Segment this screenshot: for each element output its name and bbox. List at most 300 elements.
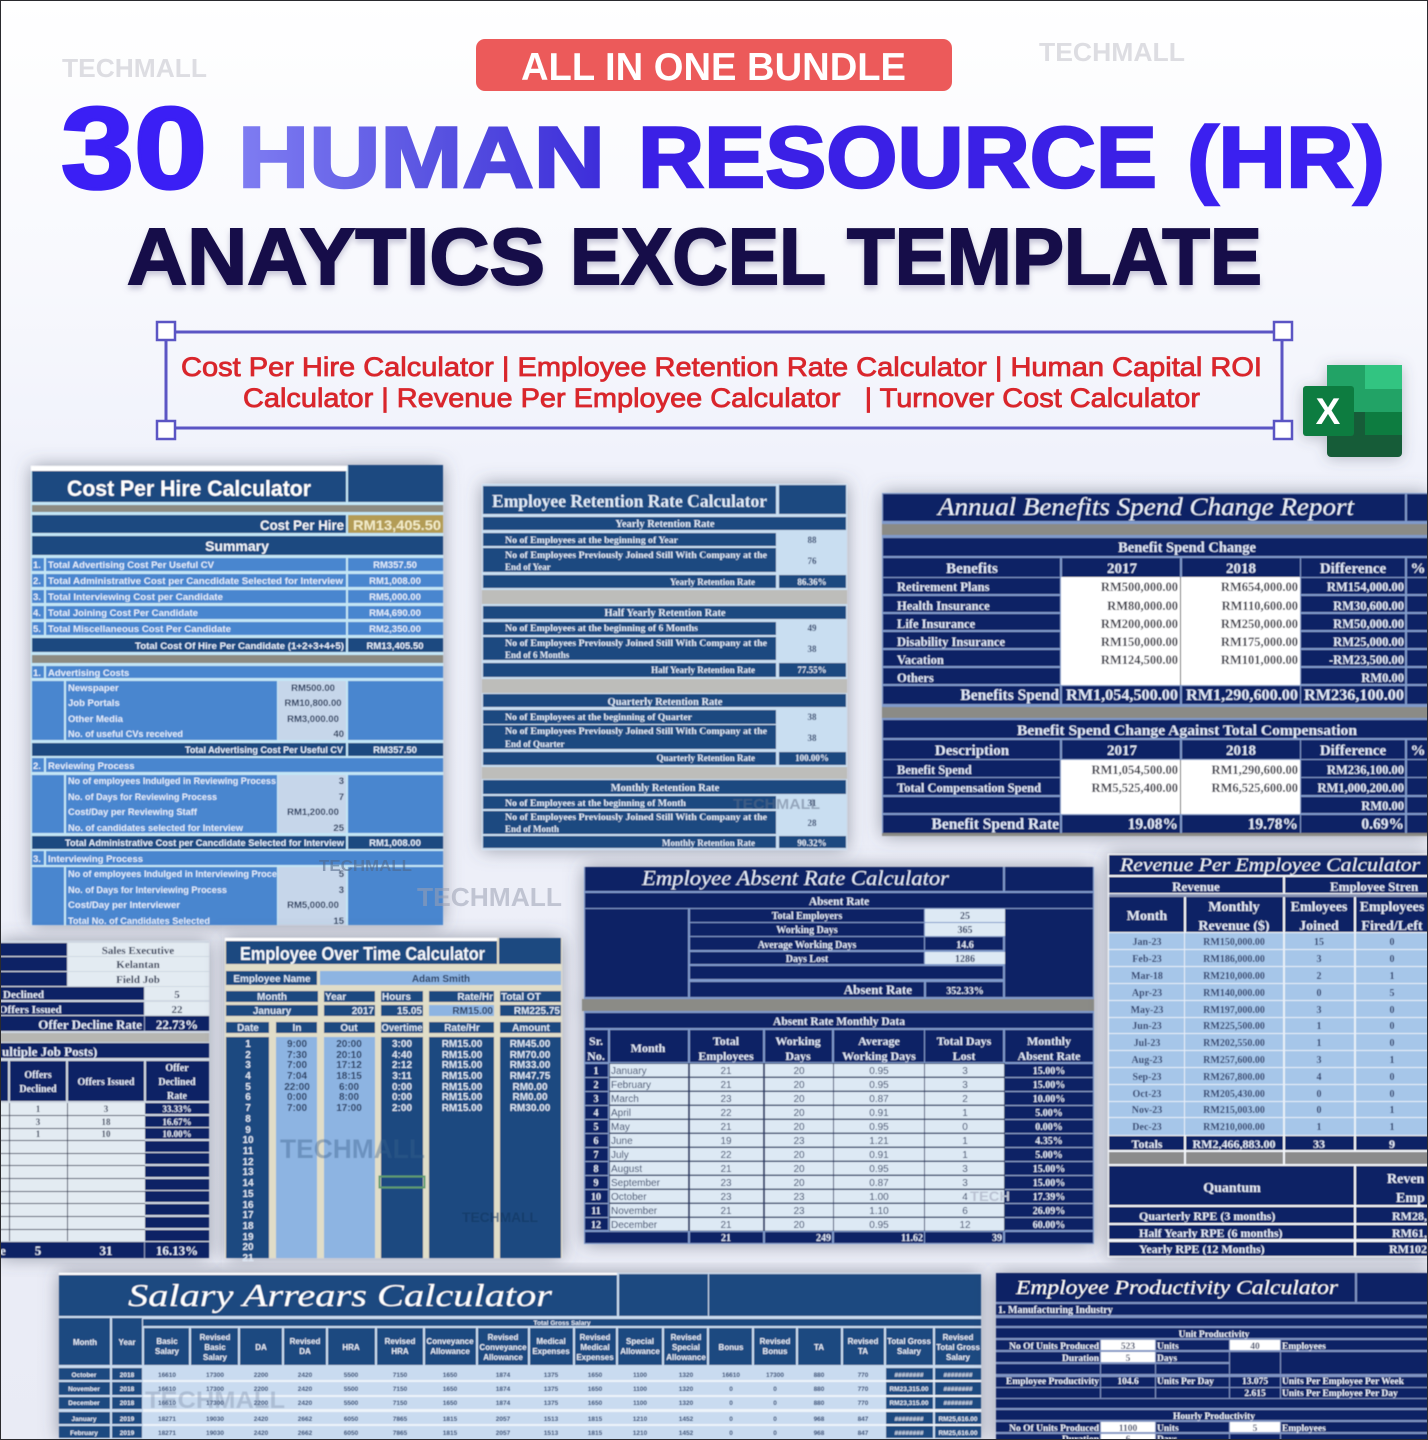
table: absent rate monthly data: 3 [962,1178,968,1189]
table: absent rate monthly data: 19 [720,1136,732,1147]
salary rows: 1815 [588,1430,603,1437]
table: absent rate monthly data: 23 [793,1206,805,1217]
table: benefit spend against total compensation: 2018 [1226,743,1256,759]
overtime log columns: 18 [242,1221,254,1232]
table headers: Revised [848,1337,878,1346]
block: monthly retention rate: No of Employees Previously Joined Still With Company at the [505,812,767,822]
table body: monthly revenue rows: 3 [1316,1055,1322,1066]
overtime log columns: RM47.75 [510,1071,551,1082]
block: quarterly retention rate: 38 [808,733,817,743]
table: absent rate monthly data: 0.87 [869,1094,889,1105]
salary rows: 2057 [496,1416,511,1423]
section: interviewing process [32,851,443,927]
table: absent rate monthly data: 1.21 [869,1136,889,1147]
salary rows: 2420 [298,1386,313,1393]
table: absent rate monthly data: January [611,1066,647,1077]
table headers: Total Gross [887,1337,931,1346]
absent rate summary [585,893,1093,997]
offer decline rate summary: 5 [174,989,180,1001]
table: absent rate monthly data: 11 [591,1206,601,1217]
table body: monthly revenue rows: 0 [1316,1105,1322,1116]
overtime log columns: 20:10 [336,1050,362,1061]
table body: monthly revenue rows: 1 [1390,1105,1394,1116]
salary rows: 2018 [120,1400,135,1407]
salary rows: 1210 [633,1416,648,1423]
summary table: 4. [33,608,41,619]
table body: monthly revenue rows: RM197,000.00 [1203,1005,1265,1016]
table body: monthly revenue rows: RM150,000.00 [1203,937,1265,948]
salary rows: 6050 [344,1416,359,1423]
table body: monthly revenue rows: Apr-23 [1132,988,1162,999]
table body: monthly revenue rows: RM257,600.00 [1203,1055,1265,1066]
table: absent rate monthly data [585,1013,1093,1244]
table: absent rate monthly data: September [611,1178,661,1189]
table: unit productivity: Employees [1282,1342,1326,1352]
salary rows: 1513 [544,1416,559,1423]
salary rows: 17300 [206,1386,224,1393]
table: absent rate monthly data: 23 [793,1192,805,1203]
table body: monthly revenue rows: RM267,800.00 [1203,1072,1265,1083]
watermark: TECHMALL [145,1387,285,1414]
table header: Employee Stren [1330,879,1419,894]
table: absent rate monthly data: 3 [962,1080,968,1091]
table: absent rate monthly data: 12 [591,1220,601,1231]
summary table: RM13,405.50 [366,641,424,652]
table: absent rate monthly data: 0.95 [869,1066,889,1077]
heading: annual benefits spend change report: Annual Benefits Spend Change Report [936,494,1355,521]
table: absent rate monthly data: 15.00% [1033,1178,1065,1189]
salary rows: 0 [773,1416,777,1423]
block: half yearly retention rate: No of Employees at the beginning of 6 Months [505,623,699,633]
offers by job post table: Offers [24,1070,52,1081]
title line 2 [127,212,1262,301]
salary rows: 880 [814,1400,825,1407]
salary rows: 1452 [679,1430,694,1437]
section: interviewing process: 3 [339,885,344,896]
table body: monthly revenue rows: Dec-23 [1132,1122,1162,1133]
badge: all in one bundle: ALL IN ONE BUNDLE [521,46,906,89]
section: reviewing process: Cost/Day per Reviewing Staff [68,807,198,818]
block: yearly retention rate: End of Year [505,562,551,572]
table: unit productivity: Duration [1062,1354,1100,1364]
absent rate summary: Days Lost [786,954,829,965]
table: absent rate monthly data: June [611,1136,633,1147]
block: monthly retention rate: Monthly Retention Rate [662,838,755,848]
salary rows: 0 [773,1430,777,1437]
salary rows: 2420 [298,1372,313,1379]
panel: offer decline rate (cropped) [0,941,209,1258]
offers by job post table: Rate [167,1091,188,1102]
block: monthly retention rate: 28 [808,818,817,828]
table: absent rate monthly data: Average [858,1034,901,1048]
table: benefit spend against total compensation: RM1,000,200.00 [1318,781,1404,795]
table headers: Allowance [620,1347,660,1356]
table headers: Special [672,1343,700,1352]
overtime log columns: RM15.00 [442,1092,483,1103]
offer decline rate summary: 22 [172,1004,183,1016]
table body: monthly revenue rows: May-23 [1131,1005,1163,1016]
summary table: RM1,008.00 [369,576,421,587]
block: yearly retention rate: No of Employees Previously Joined Still With Company at the [505,550,767,560]
table headers: Revised [760,1337,790,1346]
salary rows: 1513 [544,1430,559,1437]
overtime log columns: RM15.00 [442,1050,483,1061]
overtime log columns: RM0.00 [512,1082,548,1093]
table: absent rate monthly data: 10 [591,1192,601,1203]
absent rate summary: 1286 [955,954,975,965]
table: absent rate monthly data: 0.91 [869,1150,889,1161]
watermark: TECHMALL [733,796,820,813]
table: benefit spend against total compensation: Benefit Spend Rate [932,816,1059,833]
salary rows: 2662 [298,1430,313,1437]
summary header and values: Month [257,992,287,1003]
block: yearly retention rate: Yearly Retention Rate [670,577,755,587]
overtime log columns: 21 [242,1253,254,1264]
overtime log columns: 14 [242,1178,254,1189]
section: reviewing process [32,758,443,849]
quantum table: Quarterly RPE (3 months) [1139,1209,1275,1223]
table: absent rate monthly data: 0.95 [869,1164,889,1175]
table: absent rate monthly data: 7 [594,1150,598,1161]
heading: employee over time calculator [226,938,561,964]
salary rows: 1320 [679,1372,694,1379]
heading: salary arrears calculator: Salary Arrears Calculator [128,1277,553,1313]
table: unit productivity: 5 [1126,1354,1131,1364]
salary rows: 1815 [588,1416,603,1423]
salary rows: RM25,616.00 [938,1416,978,1423]
salary rows [59,1366,981,1440]
block: monthly retention rate [483,780,846,848]
overtime log columns: 7:04 [287,1071,307,1082]
table body: monthly revenue rows: RM186,000.00 [1203,954,1265,965]
offers by job post table: 3 [104,1104,109,1114]
table headers: Salary [203,1353,228,1362]
table: benefit spend change: RM0.00 [1361,671,1404,685]
overtime log columns: RM15.00 [442,1082,483,1093]
overtime log columns: 2:00 [392,1103,412,1114]
offer decline rate summary: Offers Issued [0,1004,62,1016]
table: absent rate monthly data: October [611,1192,647,1203]
table: absent rate monthly data: 17.39% [1033,1192,1065,1203]
summary table: 3. [33,592,41,603]
overtime log columns: 20:00 [336,1039,362,1050]
cost per hire result [32,515,443,533]
table: benefit spend change: Vacation [897,653,944,667]
absent rate summary: Total Employers [772,911,842,922]
table: benefit spend against total compensation: 2017 [1107,743,1138,759]
title line 1: (HR) [1187,110,1385,206]
offers by job post table: 10.00% [162,1129,192,1139]
table: absent rate monthly data: 11.62 [901,1233,923,1244]
block: yearly retention rate: 86.36% [797,577,827,587]
table body: monthly revenue rows: RM140,000.00 [1203,988,1265,999]
summary header and values: Total OT [501,992,541,1003]
heading: employee over time calculator: Employee Over Time Calculator [240,944,485,964]
totals row [1109,1136,1428,1151]
table: absent rate monthly data: 20 [793,1164,805,1175]
salary rows: 17300 [206,1400,224,1407]
summary table: Total Joining Cost Per Candidate [48,608,198,619]
table: benefit spend change: Benefit Spend Change [1118,540,1256,556]
selection box with calculator list: Calculator | Revenue Per Employee Calculator | Turnover Cost Calculator [243,383,1200,413]
salary rows: ######## [944,1386,973,1393]
table: benefit spend against total compensation: Difference [1320,743,1387,759]
table headers: Special [626,1337,654,1346]
block: half yearly retention rate: Half Yearly Retention Rate [651,665,755,675]
table: benefit spend change: RM25,000.00 [1333,635,1404,649]
table body: monthly revenue rows: RM215,003.00 [1203,1105,1265,1116]
section: advertising costs: 1. [33,668,41,679]
block: yearly retention rate: No of Employees at the beginning of Year [505,535,678,545]
table headers: Conveyance [479,1343,527,1352]
table: benefit spend change: RM110,600.00 [1222,599,1298,613]
table: absent rate monthly data: Absent Rate Monthly Data [773,1016,905,1028]
table headers: Revised [488,1333,518,1342]
overtime log columns: 0:00 [392,1092,412,1103]
block: monthly retention rate: Monthly Retention Rate [611,783,720,794]
table: benefit spend change: RM80,000.00 [1107,599,1178,613]
table: benefit spend change: RM30,600.00 [1333,599,1404,613]
table: unit productivity: No Of Units Produced [1009,1342,1100,1352]
panel: salary arrears calculator [59,1273,981,1440]
salary rows: 2019 [120,1430,135,1437]
table body: monthly revenue rows: 0 [1316,988,1322,999]
quantum table: RM61, [1392,1226,1427,1240]
table headers: Basic [204,1343,226,1352]
overtime log columns: 15 [242,1189,254,1200]
table body: monthly revenue rows: Mar-18 [1131,971,1163,982]
table: benefit spend against total compensation: 19.78% [1248,816,1298,833]
table: absent rate monthly data: 15.00% [1033,1164,1065,1175]
title line 2: EXCEL [570,212,826,301]
table body: monthly revenue rows [1109,933,1428,1135]
table: absent rate monthly data: 1 [962,1108,968,1119]
overtime log columns: RM15.00 [442,1071,483,1082]
overtime log columns: 12 [242,1157,254,1168]
heading: employee productivity calculator [996,1273,1428,1302]
table: benefit spend against total compensation: 0.69% [1361,816,1404,833]
overtime log columns: RM15.00 [442,1060,483,1071]
salary rows: 0 [729,1400,733,1407]
column headers: Date [237,1023,259,1034]
table body: monthly revenue rows: Jan-23 [1133,937,1161,948]
summary header and values: RM15.00 [452,1006,493,1017]
block: monthly retention rate: End of Month [505,824,559,834]
salary rows: 1815 [443,1430,458,1437]
table: benefit spend change: RM500,000.00 [1101,580,1178,594]
table: absent rate monthly data: 2 [594,1080,598,1091]
block: quarterly retention rate: 38 [808,712,817,722]
table: benefit spend change: RM200,000.00 [1101,617,1178,631]
table: absent rate monthly data: 5.00% [1035,1150,1063,1161]
section: advertising costs: 40 [333,729,344,740]
salary rows: 770 [858,1386,869,1393]
table: absent rate monthly data: May [611,1122,630,1133]
table headers: Medical [536,1337,566,1346]
heading: employee retention rate calculator: Employee Retention Rate Calculator [492,491,767,511]
table: benefit spend change: RM150,000.00 [1101,635,1178,649]
section: advertising costs: Other Media [68,714,124,725]
column headers [226,1022,561,1034]
table: absent rate monthly data: 2 [962,1094,968,1105]
section: reviewing process: RM1,008.00 [369,838,421,849]
block: monthly retention rate: 31 [808,798,817,808]
table: absent rate monthly data: 5.00% [1035,1108,1063,1119]
block: half yearly retention rate: No of Employees Previously Joined Still With Company at the [505,638,767,648]
table: absent rate monthly data: Days [785,1049,811,1063]
table body: monthly revenue rows: 1 [1390,971,1394,982]
table header: Revenue ($) [1198,919,1270,934]
table body: monthly revenue rows: 0 [1390,1089,1394,1100]
table: benefit spend against total compensation: RM236,100.00 [1327,763,1404,777]
overtime log columns: 22:00 [284,1082,310,1093]
salary rows: 2018 [120,1386,135,1393]
table headers: DA [255,1343,267,1352]
table: absent rate monthly data: August [611,1164,642,1175]
job details rows [0,943,209,986]
salary rows: 5500 [344,1386,359,1393]
overtime log columns: RM15.00 [442,1103,483,1114]
heading: employee absent rate calculator [585,866,1093,891]
table: absent rate monthly data: 15.00% [1033,1066,1065,1077]
table: absent rate monthly data: Working Days [842,1049,916,1063]
quantum table: Half Yearly RPE (6 months) [1139,1226,1283,1240]
quantum table: Emp [1396,1191,1425,1206]
table body: monthly revenue rows: 0 [1390,1038,1394,1049]
table headers: Month [73,1338,97,1347]
table: benefit spend change: RM236,100.00 [1304,687,1404,704]
table body: monthly revenue rows: Sep-23 [1133,1072,1161,1083]
table: absent rate monthly data: Month [631,1041,666,1055]
table: benefit spend against total compensation: RM1,290,600.00 [1212,763,1298,777]
table: absent rate monthly data: 60.00% [1033,1220,1065,1231]
table: unit productivity: Units [1157,1342,1179,1352]
salary rows: ######## [895,1372,924,1379]
table: absent rate monthly data: 3 [594,1094,598,1105]
offers by job post table: 1 [36,1104,41,1114]
panel: cost per hire calculator: Summary [205,538,269,554]
table: absent rate monthly data: July [611,1150,629,1161]
salary rows: 2420 [254,1416,269,1423]
table: benefit spend against total compensation: 19.08% [1128,816,1178,833]
table: absent rate monthly data: 10.00% [1033,1094,1065,1105]
table: absent rate monthly data: 20 [793,1094,805,1105]
table: benefit spend change: Life Insurance [897,617,976,631]
table: absent rate monthly data: 8 [594,1164,598,1175]
summary header and values [226,991,561,1017]
section: reviewing process: No of employees Indulged in Reviewing Process [68,776,276,787]
table body: monthly revenue rows: 0 [1390,1021,1394,1032]
section: advertising costs: RM357.50 [373,745,417,756]
section: advertising costs [32,666,443,756]
salary rows: 1650 [588,1386,603,1393]
table: benefit spend against total compensation: Description [935,743,1010,759]
table: hourly productivity: 1100 [1119,1424,1137,1434]
table: absent rate monthly data: 3 [962,1066,968,1077]
salary rows: 2057 [496,1430,511,1437]
table: absent rate monthly data: 6 [594,1136,598,1147]
table body: monthly revenue rows: 2 [1316,971,1322,982]
table: absent rate monthly data: 4 [594,1108,598,1119]
watermark: top left: TECHMALL [62,53,207,83]
table: absent rate monthly data: 0.91 [869,1108,889,1119]
offers by job post table: 1 [36,1129,41,1139]
offers by job post table: Offers Issued [78,1077,135,1088]
table: benefit spend change: RM1,290,600.00 [1186,687,1298,704]
block: half yearly retention rate: End of 6 Months [505,650,570,660]
table: benefit spend against total compensation [883,720,1428,833]
table: benefit spend change: RM50,000.00 [1333,617,1404,631]
table body: monthly revenue rows: RM202,550.00 [1203,1038,1265,1049]
summary table: Total Interviewing Cost per Candidate [48,592,223,603]
table body: monthly revenue rows: 0 [1316,1089,1322,1100]
selection box with calculator list [157,322,1292,439]
table: absent rate monthly data: 9 [594,1178,598,1189]
section: advertising costs: Job Portals [68,698,120,709]
salary rows: 0 [729,1430,733,1437]
title line 1 [61,83,1385,213]
summary table: Total Administrative Cost per Cancdidate Selected for Interview [48,576,344,587]
quantum table: RM28, [1392,1209,1427,1223]
table: absent rate monthly data: 12 [959,1220,971,1231]
section: reviewing process: 7 [339,792,344,803]
salary rows: 880 [814,1372,825,1379]
salary rows: 7150 [393,1372,408,1379]
table: unit productivity: Units Per Employee Per Day [1282,1389,1398,1399]
table body: monthly revenue rows: RM205,430.00 [1203,1089,1265,1100]
table: absent rate monthly data: Absent Rate [1018,1049,1081,1063]
section: interviewing process: No of employees Indulged in Interviewing Proce [68,869,277,880]
table headers: Revised [385,1337,415,1346]
icon: excel logo [1303,365,1402,457]
table: unit productivity: 523 [1121,1342,1135,1352]
table: benefit spend change: 2018 [1226,561,1256,577]
table: absent rate monthly data: 0 [962,1122,968,1133]
table headers: DA [299,1347,311,1356]
table body: monthly revenue rows: 1 [1390,1055,1394,1066]
salary rows: 1452 [679,1416,694,1423]
table header: Joined [1299,919,1339,934]
salary rows: 1210 [633,1430,648,1437]
table headers: Revised [580,1333,610,1342]
table: absent rate monthly data: 1.10 [869,1206,889,1217]
section: reviewing process: 25 [333,823,345,834]
table headers: Bonus [719,1343,744,1352]
overtime log columns: 7:00 [287,1103,307,1114]
overtime log columns: 10 [242,1135,254,1146]
table headers: Medical [580,1343,610,1352]
salary rows: February [70,1430,98,1437]
table: absent rate monthly data: 23 [793,1136,805,1147]
salary rows: 2420 [298,1400,313,1407]
table headers: Year [119,1338,135,1347]
overtime log columns: RM33.00 [510,1060,551,1071]
section: manufacturing industry: 1. Manufacturing Industry [998,1305,1113,1316]
salary rows: 968 [814,1416,825,1423]
table header: Emloyees [1291,900,1348,915]
heading: employee absent rate calculator: Employee Absent Rate Calculator [641,866,950,890]
table headers: Bonus [763,1347,788,1356]
salary rows: 0 [773,1386,777,1393]
table: benefit spend against total compensation: RM6,525,600.00 [1212,781,1298,795]
table header: Employees [1360,900,1425,915]
salary rows: 1815 [443,1416,458,1423]
salary rows: 0 [729,1386,733,1393]
table: benefit spend change: RM654,000.00 [1221,580,1298,594]
salary rows: 5500 [344,1400,359,1407]
table body: monthly revenue rows: 3 [1316,1005,1322,1016]
offers by job post table: Offer [165,1063,189,1074]
